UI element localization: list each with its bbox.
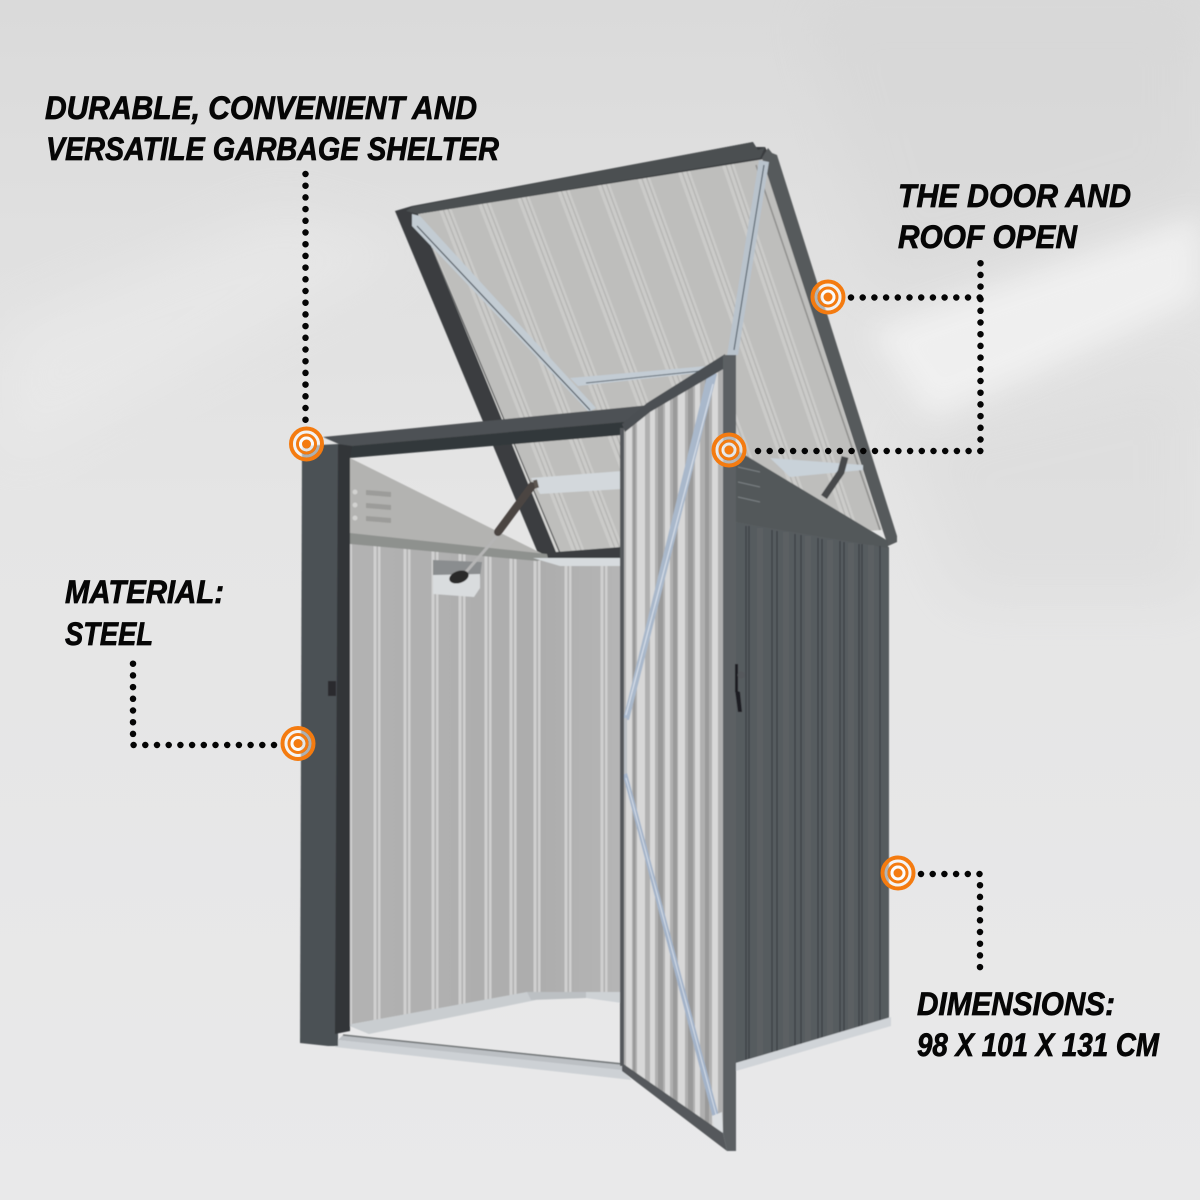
interior left gable <box>350 458 548 561</box>
callout line: durable <box>302 174 309 423</box>
icon: target dimensions <box>882 858 914 888</box>
label: material: STEEL <box>65 616 153 652</box>
wall gable <box>735 449 888 548</box>
open door <box>620 350 744 1151</box>
left gas strut <box>448 480 537 586</box>
door handle <box>735 664 744 712</box>
door braces <box>623 372 717 720</box>
icon: target door <box>714 434 744 466</box>
label: durable garbage shelter: DURABLE, CONVENIENT AND <box>45 90 477 126</box>
left post <box>300 444 338 1046</box>
label: dimensions: DIMENSIONS: <box>917 986 1115 1022</box>
label: door and roof open: THE DOOR AND <box>898 178 1131 214</box>
label: material: MATERIAL: <box>65 574 224 610</box>
strut bracket <box>433 560 482 597</box>
callout line: door and roof upper <box>851 263 980 298</box>
callout line: dimensions <box>921 874 980 968</box>
icon: target durable <box>291 428 322 460</box>
right gas strut <box>824 457 845 497</box>
label: door and roof open: ROOF OPEN <box>898 219 1078 255</box>
icon: target material <box>282 728 314 759</box>
frame top bar <box>323 405 650 449</box>
icon: target roof <box>812 282 844 312</box>
roof braces <box>412 214 596 412</box>
latch <box>328 681 336 696</box>
label: durable garbage shelter <box>45 90 499 167</box>
front frame <box>300 405 650 1046</box>
top corner bracket <box>533 558 622 566</box>
base trim <box>736 1017 891 1071</box>
callout line: door and roof lower <box>758 298 980 451</box>
open roof <box>395 142 897 609</box>
callout line: material <box>133 663 274 745</box>
right wall <box>735 449 891 1071</box>
label: dimensions <box>917 986 1160 1063</box>
label: dimensions: 98 X 101 X 131 CM <box>917 1027 1160 1063</box>
interior back wall <box>347 458 622 1040</box>
label: door and roof open <box>898 178 1131 255</box>
garbage shelter illustration <box>300 142 897 1151</box>
label: durable garbage shelter: VERSATILE GARBAGE SHELTER <box>46 131 499 167</box>
label: material <box>65 574 224 652</box>
roof frame <box>395 142 771 558</box>
floor rails <box>335 992 632 1080</box>
door frame <box>622 354 725 432</box>
